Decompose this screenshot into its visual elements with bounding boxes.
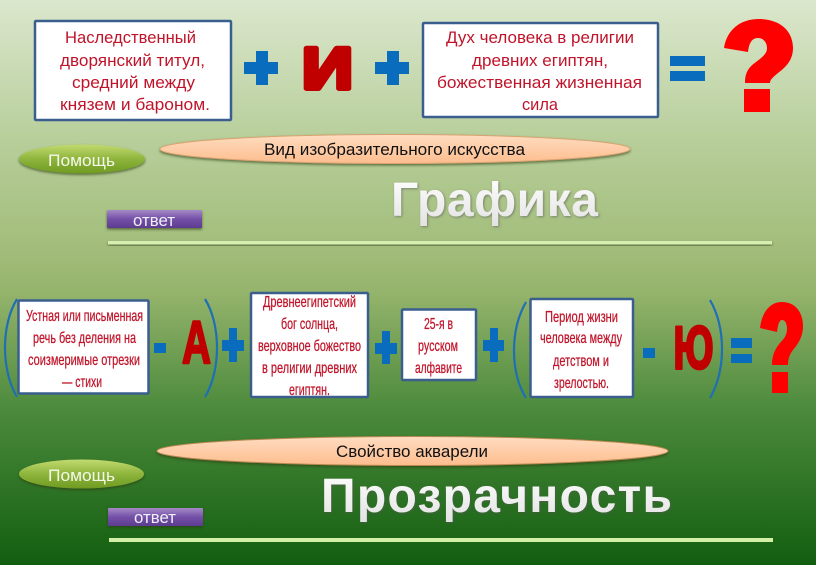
help button [19, 460, 144, 488]
panel: rebus 2 clue box, letter 25: алфавите [415, 360, 462, 377]
panel: rebus 2 clue box, sun god: Древнеегипетский [263, 294, 356, 311]
panel: rebus 2 clue box, youth: детством и [553, 353, 609, 370]
icon: left bracket [514, 302, 526, 398]
panel: rebus 2 clue box, sun god: в религии древних [262, 360, 357, 377]
icon: question mark [724, 19, 793, 112]
panel: rebus 2 clue box, verse: речь без деления на [33, 330, 136, 347]
hint oval: Вид изобразительного искусства [264, 140, 526, 159]
panel: rebus 1 clue box, noble title: князем и бароном. [60, 96, 210, 114]
panel: rebus 2 clue box, youth [530, 299, 633, 397]
panel: rebus 1 clue box, spirit: божественная жизненная [437, 74, 642, 92]
answer: Графика: Графика [391, 174, 598, 227]
answer button: ответ [133, 211, 175, 230]
panel: rebus 1 clue box, noble title: дворянский титул, [60, 52, 205, 70]
panel: rebus 2 clue box, letter 25: русском [418, 338, 458, 355]
answer button [107, 210, 202, 230]
icon: plus [222, 328, 244, 362]
panel: rebus 2 clue box, verse: Устная или письменная [26, 308, 143, 325]
panel: rebus 2 clue box, sun god: верховное божество [258, 338, 361, 355]
answer: Прозрачность: Прозрачность [321, 470, 672, 523]
panel: rebus 1 clue box, noble title [35, 21, 231, 120]
panel: rebus 1 clue box, spirit: сила [522, 96, 559, 114]
panel: rebus 2 clue box, verse: — стихи [62, 374, 102, 391]
panel: rebus 2 clue box, letter 25: 25-я в [424, 316, 453, 333]
icon: plus [483, 328, 504, 362]
panel: rebus 1 clue box, noble title: средний между [72, 74, 196, 92]
icon: equals [670, 56, 705, 81]
help button: Помощь [48, 466, 115, 485]
icon: left bracket [5, 299, 17, 397]
icon: equals [731, 338, 752, 363]
icon: right bracket [205, 299, 217, 397]
panel: rebus 1 clue box, spirit: Дух человека в религии [446, 29, 634, 47]
hint oval [160, 134, 630, 164]
answer button [108, 508, 203, 527]
panel: rebus 2 clue box, verse: соизмеримые отрезки [28, 352, 140, 369]
icon: plus [375, 331, 397, 364]
panel: rebus 2 clue box, sun god: египтян. [289, 382, 330, 399]
icon: plus [244, 51, 278, 85]
hint oval [157, 436, 668, 466]
answer button: ответ [134, 508, 176, 527]
panel: rebus 2 clue box, verse [18, 300, 148, 394]
help button [19, 144, 145, 174]
icon: question mark [760, 302, 803, 393]
letter Ю: Ю [674, 314, 714, 382]
help button: Помощь [48, 151, 115, 170]
panel: rebus 2 clue box, sun god [251, 293, 368, 399]
panel: rebus 1 clue box, spirit [423, 23, 658, 117]
icon: minus [154, 343, 166, 353]
panel: rebus 1 clue box, noble title: Наследственный [65, 29, 196, 47]
letter И: И [302, 36, 353, 102]
panel: rebus 2 clue box, youth: зрелостью. [554, 375, 609, 392]
panel: rebus 2 clue box, letter 25 [402, 310, 476, 380]
icon: right bracket [710, 300, 722, 398]
panel: rebus 2 clue box, sun god: бог солнца, [281, 316, 338, 333]
icon: minus [643, 348, 655, 358]
panel: rebus 2 clue box, youth: человека между [540, 330, 622, 347]
letter А: А [182, 309, 211, 376]
panel: rebus 2 clue box, youth: Период жизни [545, 309, 618, 326]
icon: plus [375, 51, 409, 85]
panel: rebus 1 clue box, spirit: древних египтян, [472, 52, 608, 70]
hint oval: Свойство акварели [336, 442, 488, 461]
